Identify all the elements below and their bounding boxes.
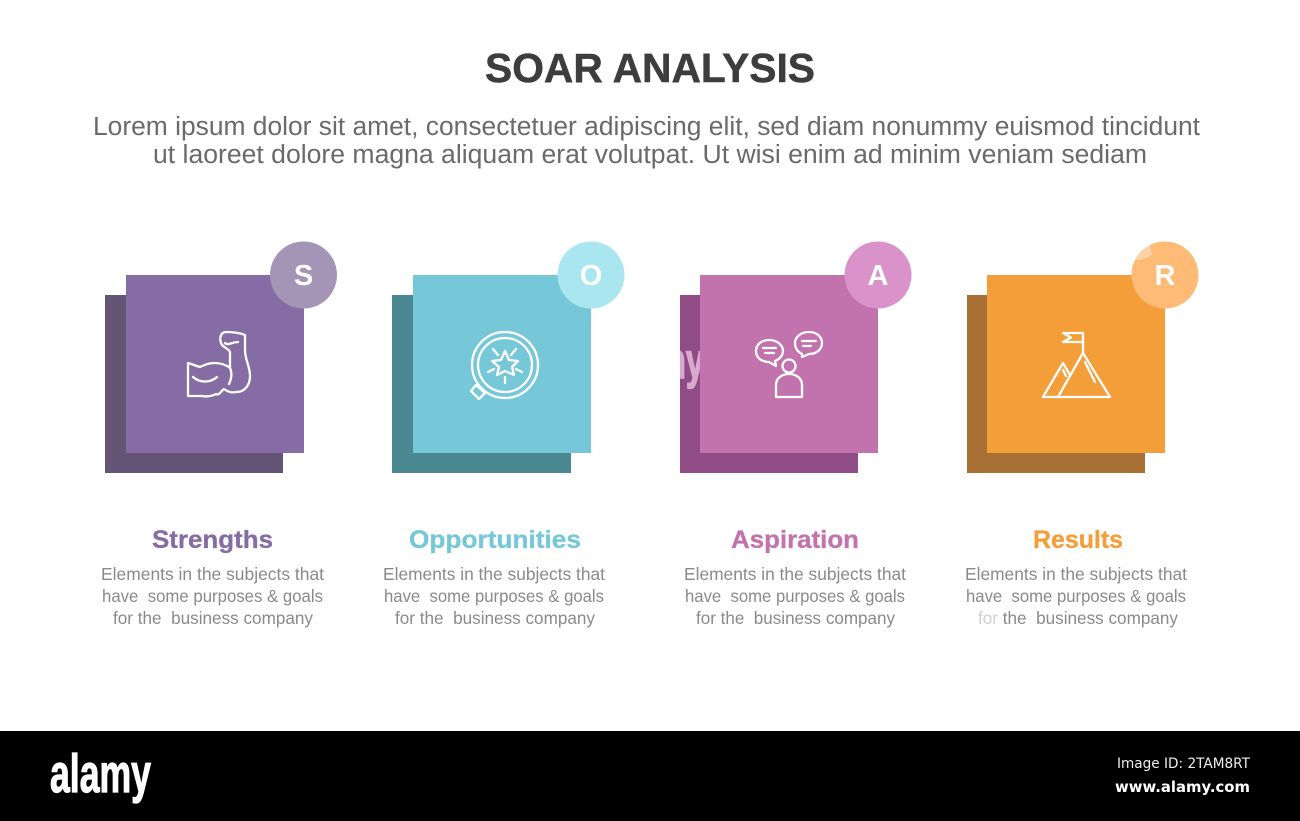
description: results: [965, 564, 1187, 628]
icon: magnifier with star: [471, 332, 538, 399]
badge: A: [844, 242, 912, 308]
back square: results: [967, 295, 1145, 473]
description: strengths: have some purposes & goals: [102, 586, 323, 606]
website: www.alamy.com: [1115, 778, 1250, 796]
subtitle text: Lorem ipsum dolor sit amet, consectetuer adipiscing elit, sed diam nonummy euismod tincidunt: [93, 113, 1200, 141]
description: strengths: Elements in the subjects that: [101, 564, 324, 584]
description: results: Elements in the subjects that: [965, 564, 1187, 584]
front square: opportunities: [413, 275, 591, 453]
footer bar: [0, 731, 1300, 821]
heading: opportunities: Opportunities: [409, 526, 581, 554]
back square: strengths: [105, 295, 283, 473]
description: opportunities: [383, 564, 605, 628]
heading: strengths: Strengths: [152, 526, 273, 554]
badge: O: [558, 242, 624, 308]
description: strengths: for the business company: [113, 608, 313, 628]
description: opportunities: Elements in the subjects that: [383, 564, 605, 584]
description: aspiration: [684, 564, 906, 628]
front square: results: [987, 275, 1165, 453]
heading: aspiration: Aspiration: [731, 526, 859, 554]
badge: O: O: [580, 260, 602, 292]
back square: aspiration: [680, 295, 858, 473]
icon: person with speech bubbles: [756, 332, 822, 397]
description: results: have some purposes & goals: [966, 586, 1186, 606]
title: SOAR ANALYSIS: [485, 45, 815, 91]
panel: results: [965, 242, 1198, 628]
badge: R: [1132, 242, 1198, 308]
panel: opportunities: [383, 242, 624, 628]
badge: S: S: [294, 260, 313, 292]
description: opportunities: have some purposes & goals: [384, 586, 604, 606]
badge: A: A: [868, 260, 889, 292]
description: results: for the business company: [978, 608, 1178, 628]
image id: Image ID: 2TAM8RT: [1117, 756, 1250, 772]
description: aspiration: have some purposes & goals: [685, 586, 905, 606]
panel: strengths: [101, 242, 337, 628]
subtitle text: ut laoreet dolore magna aliquam erat volutpat. Ut wisi enim ad minim veniam sediam: [153, 141, 1147, 169]
front square: aspiration: [700, 275, 878, 453]
badge: S: [270, 242, 337, 308]
description: strengths: [101, 564, 324, 628]
badge: R: R: [1155, 260, 1176, 292]
icon: mountain with flag: [1043, 333, 1110, 397]
front square: strengths: [126, 275, 304, 453]
panel: aspiration: [666, 242, 912, 628]
description: aspiration: Elements in the subjects that: [684, 564, 906, 584]
description: aspiration: for the business company: [696, 608, 895, 628]
description: opportunities: for the business company: [395, 608, 595, 628]
heading: results: Results: [1033, 526, 1123, 554]
logo: alamy: alamy: [50, 744, 151, 804]
icon: flexed arm: [188, 332, 250, 396]
back square: opportunities: [392, 295, 571, 473]
subtitle text: [93, 113, 1200, 169]
